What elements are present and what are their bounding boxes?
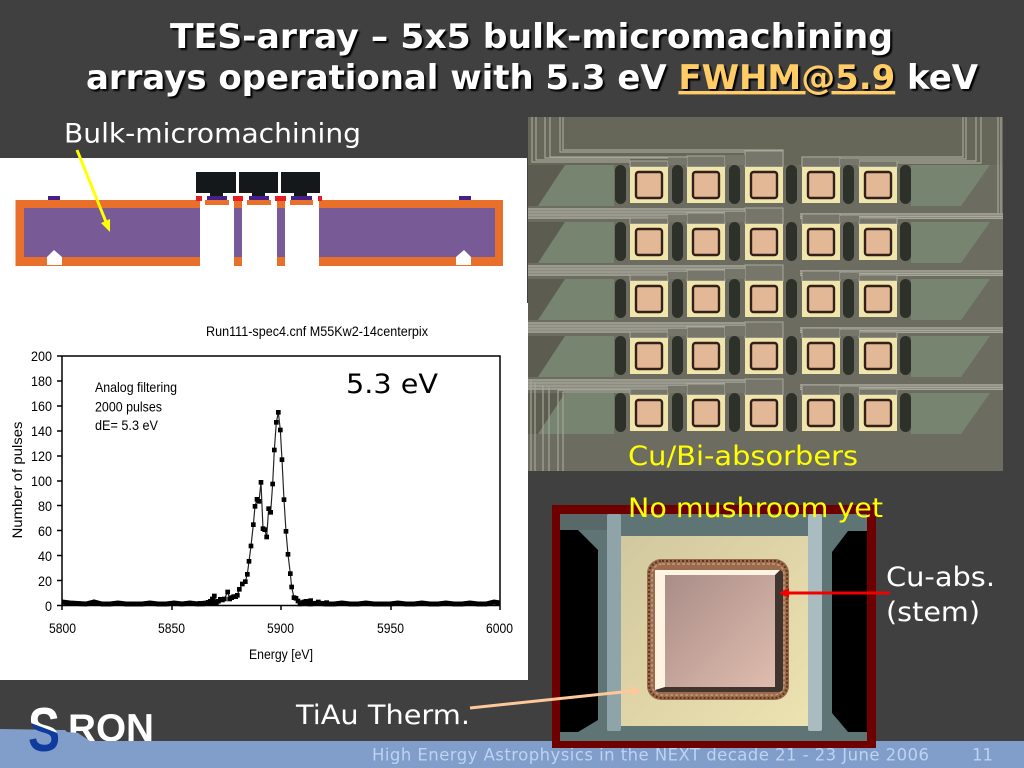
y axis title: Number of pulses xyxy=(9,422,25,538)
callout: Cu-abs stem xyxy=(886,562,995,628)
x axis labels: 5950 xyxy=(377,620,404,636)
logo letter: S: S xyxy=(28,696,60,765)
footer conference text: High Energy Astrophysics in the NEXT decade 21 - 23 June 2006 xyxy=(372,746,929,764)
arrow: red to stem xyxy=(779,588,890,598)
x axis title: Energy [eV] xyxy=(249,646,313,662)
chart annotation: dE= 5.3 eV xyxy=(95,417,159,433)
callout: TiAu thermometer: TiAu Therm. xyxy=(295,700,470,731)
callout: Cu-abs stem: Cu-abs. xyxy=(886,562,995,593)
x axis labels: 5900 xyxy=(267,620,294,636)
row interconnect bands xyxy=(528,208,1003,219)
y axis labels: 40 xyxy=(38,548,52,564)
y axis labels: 120 xyxy=(31,448,52,464)
chart annotation xyxy=(95,379,177,433)
panel: spectrum chart xyxy=(0,303,528,680)
y axis labels: 60 xyxy=(38,523,52,539)
chart title: Run111-spec4.cnf M55Kw2-14centerpix xyxy=(206,323,428,339)
arrow: yellow pointer to substrate xyxy=(77,150,110,232)
chart annotation: Analog filtering xyxy=(95,379,177,395)
x axis labels: 5800 xyxy=(49,620,76,636)
bond traces bottom xyxy=(531,380,630,471)
baseline data xyxy=(62,601,216,604)
x axis labels xyxy=(49,620,513,636)
y axis labels: 0 xyxy=(45,598,52,614)
y axis labels: 200 xyxy=(31,348,52,364)
title: arrays operational with 5.3 eV FWHM@5.9 keV xyxy=(86,58,979,98)
detector rows xyxy=(528,151,990,206)
title: TES-array – 5x5 bulk-micromachining xyxy=(170,17,893,57)
title xyxy=(86,17,981,100)
logo letter: S: S xyxy=(28,696,60,765)
panel: 5x5 array micrograph xyxy=(528,117,1003,471)
callout: Cu-abs stem: (stem) xyxy=(886,597,980,628)
y axis labels: 160 xyxy=(31,398,52,414)
title: arrays operational with 5.3 eV FWHM@5.9 keV xyxy=(88,60,981,100)
arrow: peach to thermometer xyxy=(470,686,641,708)
x axis labels: 6000 xyxy=(486,620,513,636)
panel: cross-section diagram xyxy=(0,158,527,304)
bond traces top xyxy=(532,117,1001,219)
photo label: no mushroom: No mushroom yet xyxy=(628,493,883,524)
y axis labels: 80 xyxy=(38,498,52,514)
panel: close-up pixel photo xyxy=(552,505,876,748)
y axis labels xyxy=(31,348,52,614)
y axis labels: 140 xyxy=(31,423,52,439)
footer page number: 11 xyxy=(972,746,993,764)
footer bar xyxy=(0,729,1024,768)
micrograph label: absorbers: Cu/Bi-absorbers xyxy=(628,441,858,472)
peak data xyxy=(200,412,327,604)
heading: bulk-micromachining: Bulk-micromachining xyxy=(64,118,361,150)
logo wordmark: RON: RON xyxy=(68,707,154,750)
x axis labels: 5850 xyxy=(158,620,185,636)
plot frame and ticks xyxy=(57,356,500,610)
title: TES-array – 5x5 bulk-micromachining xyxy=(172,19,895,59)
logo letter: S xyxy=(29,708,58,752)
resolution label: 5.3 eV xyxy=(346,369,439,400)
y axis labels: 180 xyxy=(31,373,52,389)
chart annotation: 2000 pulses xyxy=(95,398,162,414)
y axis labels: 20 xyxy=(38,573,52,589)
y axis labels: 100 xyxy=(31,473,52,489)
